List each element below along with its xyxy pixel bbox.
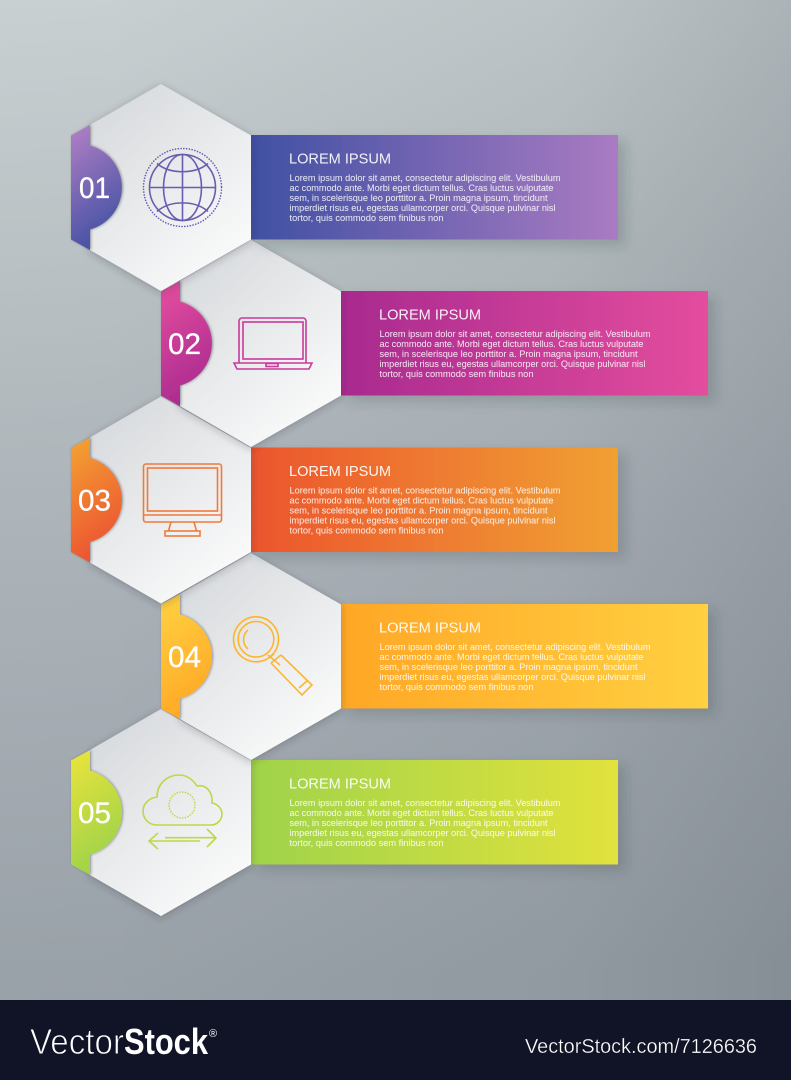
number tab 05 [71,750,122,875]
number tab 03 [71,438,122,562]
hexagon 02 [180,240,341,447]
number tab 01 [71,125,122,250]
banner 02 [341,291,708,396]
number tab 04: 04 [168,641,201,674]
footer logo [30,1021,217,1062]
banner 01: Lorem ipsum dolor sit amet, consectetur adipiscing elit. Vestibulum [290,172,561,183]
number tab 05: 05 [78,797,111,830]
banner 04: Lorem ipsum dolor sit amet, consectetur adipiscing elit. Vestibulum [380,641,651,652]
banner 04: sem, in scelerisque leo porttitor a. Proin magna ipsum, tincidunt [380,661,638,672]
banner 03 [251,448,618,552]
banner 05: LOREM IPSUM [289,776,391,792]
step 04: yellow search [161,553,708,760]
footer logo: Vector [30,1021,124,1062]
banner 03: Lorem ipsum dolor sit amet, consectetur adipiscing elit. Vestibulum [290,484,561,496]
banner 05: sem, in scelerisque leo porttitor a. Proin magna ipsum, tincidunt [290,817,548,828]
banner 03: sem, in scelerisque leo porttitor a. Proin magna ipsum, tincidunt [290,504,548,516]
icon: cloud with arrows [143,775,222,849]
banner 02: LOREM IPSUM [379,306,481,324]
hexagon 01 [90,84,251,291]
banner 02: Lorem ipsum dolor sit amet, consectetur adipiscing elit. Vestibulum [380,328,651,339]
number tab 02 [161,281,212,406]
banner 04: tortor, quis commodo sem finibus non [380,681,534,692]
banner 03: LOREM IPSUM [289,463,391,480]
banner 01: sem, in scelerisque leo porttitor a. Proin magna ipsum, tincidunt [290,192,548,203]
banner 05: tortor, quis commodo sem finibus non [290,837,444,848]
icon: magnifying glass [234,617,312,695]
banner 04 [341,604,708,708]
step 05: green cloud transfer [71,709,618,916]
banner 04: imperdiet risus eu, egestas ullamcorper orci. Quisque pulvinar nisl [380,671,646,682]
icon: laptop [234,318,312,369]
banner 05: Lorem ipsum dolor sit amet, consectetur adipiscing elit. Vestibulum [290,797,561,808]
footer logo: Stock [124,1021,209,1062]
hexagon 03 [90,396,251,604]
footer bar [0,1000,791,1080]
number tab 02: 02 [168,328,201,361]
banner 05 [251,760,618,864]
footer url: VectorStock.com/7126636 [525,1035,757,1058]
banner 04: ac commodo ante. Morbi eget dictum tellus. Cras luctus vulputate [380,651,644,662]
banner 02: imperdiet risus eu, egestas ullamcorper orci. Quisque pulvinar nisl [380,358,646,369]
banner 04: LOREM IPSUM [379,620,481,636]
banner 03: imperdiet risus eu, egestas ullamcorper orci. Quisque pulvinar nisl [290,514,556,526]
banner 03: tortor, quis commodo sem finibus non [290,524,444,536]
banner 02: tortor, quis commodo sem finibus non [380,368,534,379]
icon: globe [144,148,222,226]
number tab 04 [161,594,212,719]
banner 01: imperdiet risus eu, egestas ullamcorper orci. Quisque pulvinar nisl [290,202,556,213]
footer logo: ® [209,1028,217,1040]
banner 05: imperdiet risus eu, egestas ullamcorper orci. Quisque pulvinar nisl [290,827,556,838]
number tab 03: 03 [78,484,111,518]
step 03: orange monitor [71,396,618,604]
banner 05: ac commodo ante. Morbi eget dictum tellus. Cras luctus vulputate [290,807,554,818]
banner 01: LOREM IPSUM [289,150,391,168]
icon: desktop monitor [144,464,222,536]
hexagon 04 [180,553,341,760]
banner 01: ac commodo ante. Morbi eget dictum tellus. Cras luctus vulputate [290,182,554,193]
banner 01 [251,135,618,240]
step 01: purple globe [71,84,618,291]
number tab 01: 01 [79,172,110,205]
banner 01: tortor, quis commodo sem finibus non [290,212,444,223]
step 02: magenta laptop [161,240,708,447]
hexagon 05 [90,709,251,916]
banner 02: ac commodo ante. Morbi eget dictum tellus. Cras luctus vulputate [380,338,644,349]
banner 03: ac commodo ante. Morbi eget dictum tellus. Cras luctus vulputate [290,494,554,506]
banner 02: sem, in scelerisque leo porttitor a. Proin magna ipsum, tincidunt [380,348,638,359]
